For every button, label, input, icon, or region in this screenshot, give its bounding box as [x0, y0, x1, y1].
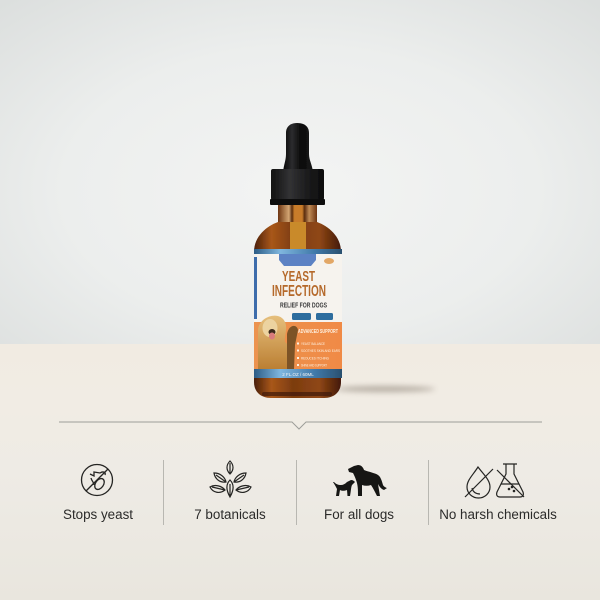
label: no harsh chemicals: No harsh chemicals — [439, 506, 557, 522]
label dog photo — [258, 316, 298, 369]
bottle shadow — [335, 386, 435, 392]
table surface — [0, 344, 600, 600]
label side stripe — [254, 257, 257, 319]
label logo — [324, 258, 334, 264]
icon: botanical leaves — [210, 461, 251, 497]
dropper bulb — [283, 123, 313, 172]
icon: two dogs — [333, 465, 387, 496]
product bottle: REDUCES ITCHING — [301, 356, 329, 360]
label top band — [254, 249, 342, 254]
bottle neck — [278, 204, 317, 224]
label: 7 botanicals: 7 botanicals — [194, 506, 266, 522]
product bottle: INFECTION — [272, 283, 326, 300]
column separators — [164, 460, 428, 525]
icon: crossed out yeast — [82, 464, 112, 496]
label: stops yeast: Stops yeast — [63, 506, 133, 522]
icon: no harsh chemicals — [465, 464, 524, 498]
label title: YEAST — [282, 268, 315, 285]
product bottle: SOOTHES SKIN AND EARS — [301, 348, 340, 353]
label orange panel — [254, 322, 342, 369]
label: for all dogs: For all dogs — [324, 506, 394, 522]
product bottle — [254, 123, 342, 398]
label orange text: ADVANCED SUPPORT — [298, 329, 338, 335]
label pills — [292, 313, 311, 320]
cap base ring — [270, 199, 325, 205]
label white area — [254, 249, 342, 323]
divider line with notch — [59, 422, 542, 429]
dropper cap — [271, 169, 324, 200]
bottle base — [262, 392, 332, 396]
glass body — [254, 222, 341, 398]
label bottom band — [254, 369, 342, 378]
product bottle: 2 FL.OZ / 60ML — [282, 372, 314, 377]
label blue tab — [279, 254, 316, 266]
product bottle: RELIEF FOR DOGS — [280, 302, 327, 310]
product bottle: SHINE AND SUPPORT — [301, 362, 327, 368]
wall background — [0, 0, 600, 344]
liquid highlight — [290, 222, 306, 250]
product bottle: YEAST BALANCE — [301, 341, 325, 346]
